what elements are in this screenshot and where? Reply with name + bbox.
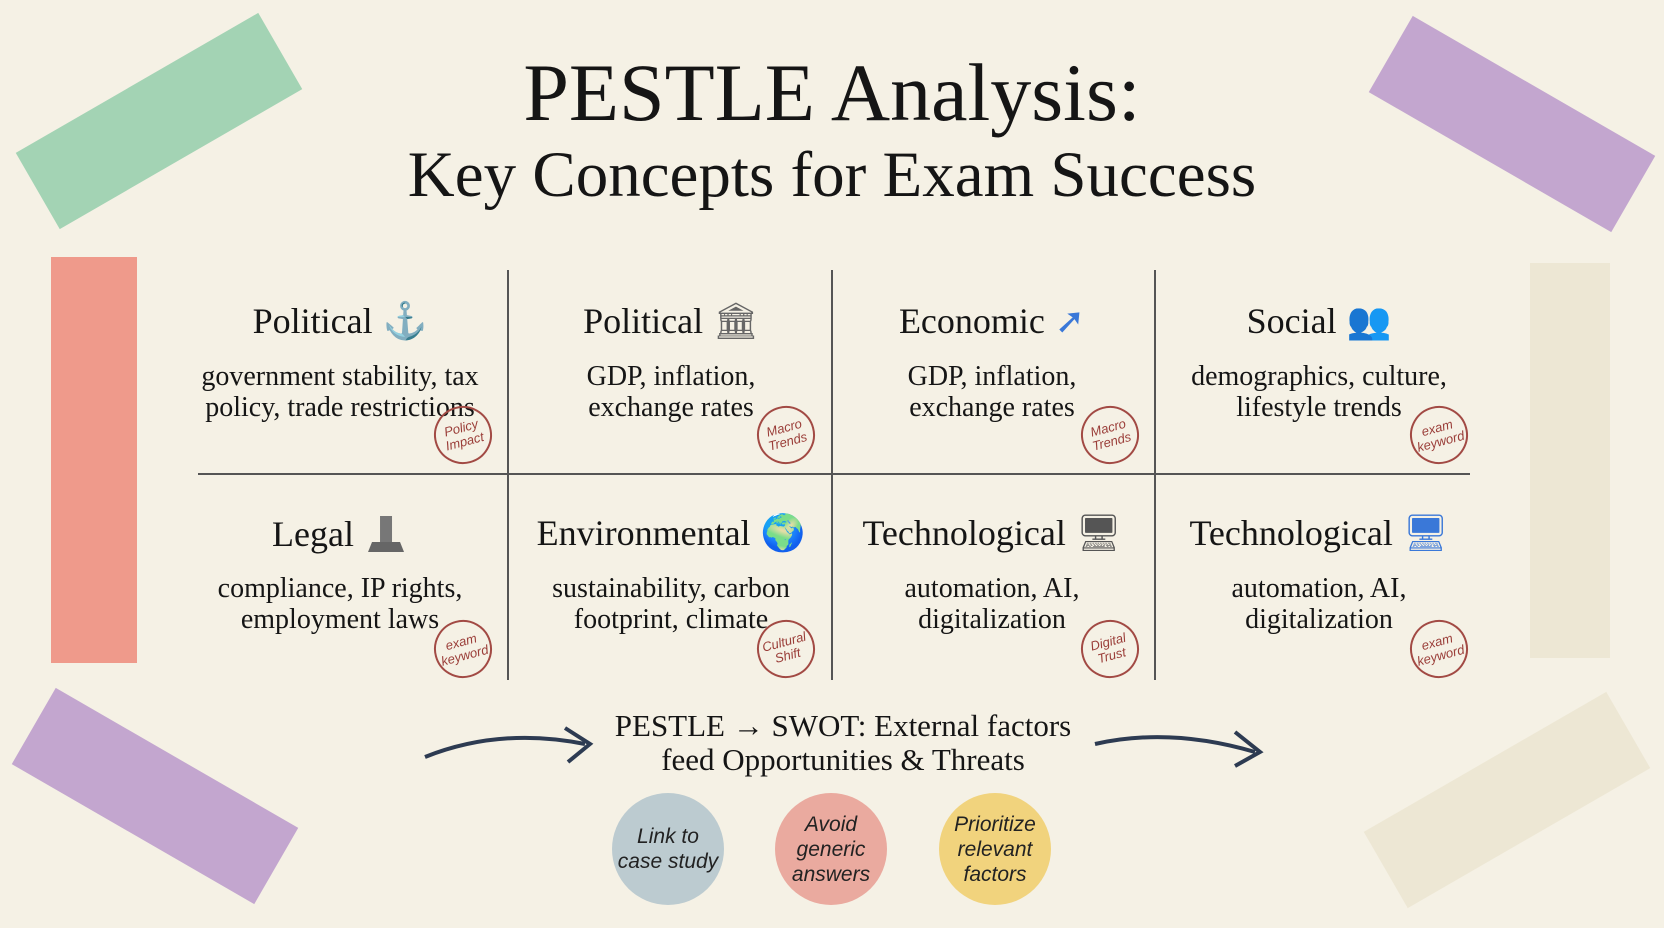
cell: Technological 2: exam [1420,630,1454,653]
cell: Legal: keyword [439,642,490,669]
subtitle: Key Concepts for Exam Success [408,139,1256,211]
cell: Political 1: government stability, tax [201,361,479,392]
cell: Technological 1 [862,513,1140,678]
cell: Environmental: Environmental [537,513,751,553]
cell: Environmental: sustainability, carbon [552,573,790,604]
cell: Political 1: Political [253,301,373,341]
tape: purple bottom-left [12,688,298,904]
cell: Political 1 [201,300,492,464]
cell: Economic: GDP, inflation, [908,361,1076,392]
cell: Social: keyword [1415,428,1466,455]
cell: Political 1: policy, trade restrictions [205,392,475,423]
cell: Social: demographics, culture, [1191,361,1447,392]
title: PESTLE Analysis: [523,47,1141,138]
cell: Environmental [537,513,816,678]
tape: red left [51,257,137,663]
cell: Social: Social [1247,301,1337,341]
cell: Technological 1: Digital [1089,630,1127,654]
cell: Social: 👥 [1347,301,1391,341]
cell: Legal: employment laws [241,604,439,635]
cell: Social: exam [1420,416,1454,439]
cell: Legal [218,514,492,678]
stamp [427,399,499,471]
cell: Economic: ➚ [1055,301,1085,341]
cell: Legal: Legal [272,514,354,554]
cell: Political 2: Trends [767,429,809,454]
cell: Technological 1: Trust [1096,644,1127,666]
tape: cream bottom-right [1364,692,1650,908]
cell: Technological 2: digitalization [1245,604,1393,635]
cell: Technological 2 [1189,513,1468,678]
PESTLE to SWOT text: PESTLE → SWOT: External factors [615,708,1071,743]
cell: Economic: Macro [1089,416,1127,440]
stamp: Impact [444,429,485,454]
cell: Political 1: ⚓ [383,301,427,341]
cell: Legal: compliance, IP rights, [218,573,462,604]
cell: Environmental: Cultural [760,629,808,655]
tip: avoid generic answers [775,793,887,905]
tip: link to case study: case study [618,850,718,873]
cell: Political 2: GDP, inflation, [587,361,755,392]
tip: link to case study [612,793,724,905]
tip: prioritize relevant factors [939,793,1051,905]
cell: Political 2: Macro [765,416,803,440]
cell: Political 2: Political [583,301,703,341]
cell: Environmental: footprint, climate [574,604,768,635]
PESTLE to SWOT text [615,708,1071,777]
cell: Political 2: exchange rates [588,392,754,423]
cell: Economic [899,301,1140,464]
cell: Legal: exam [444,630,478,653]
cell: Social: lifestyle trends [1236,392,1402,423]
arrow: left [424,726,594,764]
tip: link to case study: Link to [637,825,699,848]
stamp: Policy [442,416,480,439]
tape: green top-left [16,13,302,229]
tip: prioritize relevant factors: Prioritize [954,812,1036,836]
cell: Economic: exchange rates [909,392,1075,423]
tip: avoid generic answers: generic [797,838,865,860]
tip: prioritize relevant factors: relevant [958,838,1032,860]
tip: avoid generic answers: Avoid [805,812,857,836]
cell: Technological 1: digitalization [918,604,1066,635]
cell: Economic: Economic [899,301,1045,341]
cell: Technological 2: Technological [1189,513,1393,553]
cell: Social [1191,301,1468,464]
tape: cream right [1530,263,1610,658]
cell: Environmental: Shift [773,645,802,666]
cell: Environmental: 🌍 [761,513,805,553]
cell: Technological 1: automation, AI, [905,573,1079,604]
cell: Technological 1: Technological [862,513,1066,553]
cell: Technological 2: automation, AI, [1232,573,1406,604]
cell: Political 2 [583,301,816,464]
cell: Political 2: 🏛 [713,301,759,341]
cell: Technological 1: 🖥 [1076,513,1122,553]
tape: purple top-right [1369,16,1655,232]
grid [198,270,1470,680]
cell: Technological 2: keyword [1415,642,1466,669]
PESTLE to SWOT text: feed Opportunities & Threats [661,742,1025,777]
cell: Economic: Trends [1091,429,1133,454]
arrow: right [1094,730,1264,768]
tip: prioritize relevant factors: factors [963,862,1027,886]
cell: Technological 2: 🖥 [1403,513,1449,553]
tip: avoid generic answers: answers [792,862,870,886]
